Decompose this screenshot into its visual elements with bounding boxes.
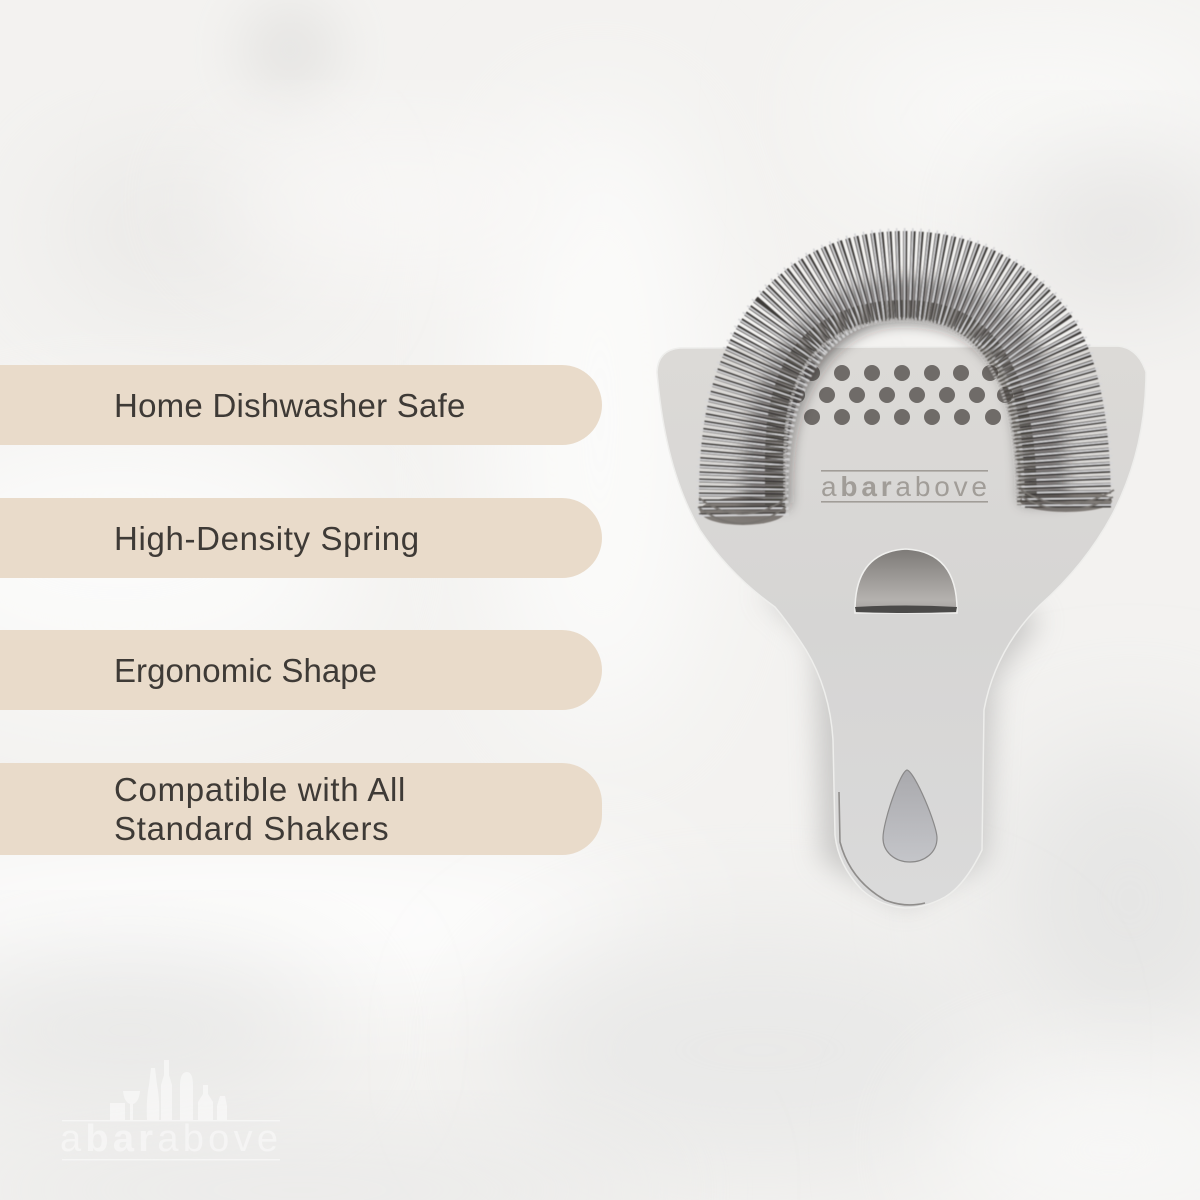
spring back coils: [742, 274, 1068, 514]
feature pill: Ergonomic Shape: [0, 630, 602, 710]
feature pill: Home Dishwasher Safe: [0, 365, 602, 445]
strainer body: [657, 346, 1146, 908]
spring inner highlight: [785, 320, 1017, 500]
spring front coils: [742, 274, 1068, 516]
feature pill: Compatible with All Standard Shakers: Standard Shakers: [114, 810, 389, 847]
logo wordmark: abarabove: [60, 1118, 278, 1160]
half-moon opening: [855, 549, 957, 613]
second plate edge: [839, 792, 925, 905]
logo rules: [62, 1120, 280, 1121]
feature pill: Compatible with All Standard Shakers: Compatible with All: [114, 771, 406, 808]
strainer perforations: [789, 365, 1013, 425]
shadow under strainer: [760, 590, 1040, 905]
feature pill: Ergonomic Shape: Ergonomic Shape: [114, 652, 377, 688]
teardrop hole: [883, 770, 937, 862]
feature pill: High-Density Spring: High-Density Spring: [114, 520, 420, 556]
spring end rings: [698, 490, 1114, 524]
coiled spring: [698, 274, 1114, 525]
feature pill: Home Dishwasher Safe: Home Dishwasher Safe: [114, 386, 466, 424]
bottles silhouette: [110, 1060, 227, 1120]
engraved logo: abarabove: [821, 471, 987, 502]
spring mid tone band: [766, 300, 1044, 508]
spring end bases: [700, 490, 1112, 525]
feature pill: High-Density Spring: [0, 498, 602, 578]
spring inner dense coils: [775, 310, 1027, 505]
feature pill: Compatible with All Standard Shakers: [0, 763, 602, 855]
